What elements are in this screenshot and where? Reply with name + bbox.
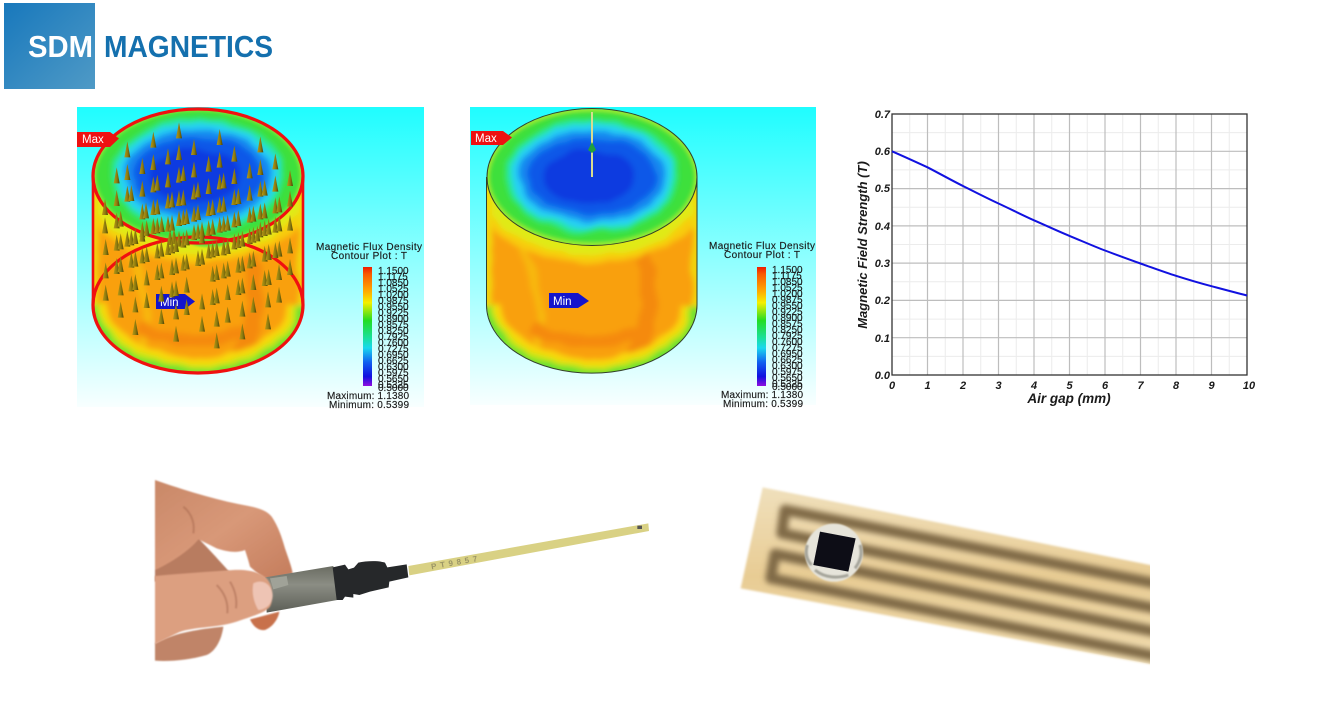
colour bar scale: 0.7275 [772, 343, 803, 354]
flag: Max [471, 131, 512, 145]
colour bar scale: 0.9550 [378, 302, 409, 313]
colour bar scale [772, 265, 803, 393]
handle button [270, 576, 288, 589]
y axis ticks: 0.6 [875, 146, 891, 158]
flag: Min [549, 293, 589, 308]
legend title: Magnetic Flux Density [709, 241, 815, 252]
colour bar scale: 0.8900 [378, 314, 409, 325]
colour bar scale: 1.0200 [772, 289, 803, 300]
max and min values: Maximum: 1.1380 [327, 391, 409, 402]
colour bar scale: 0.6625 [378, 356, 409, 367]
colour bar scale: 0.5650 [378, 374, 409, 385]
colour bar scale: 1.1175 [772, 271, 802, 282]
colour bar scale: 0.7925 [378, 332, 409, 343]
colour bar scale: 0.6300 [378, 362, 409, 373]
logo text MAGNETICS: MAGNETICS [104, 29, 273, 64]
colour bar [757, 267, 766, 386]
legend: flux density [709, 241, 815, 410]
y axis ticks [875, 109, 891, 382]
max and min values: Maximum: 1.1380 [721, 390, 803, 401]
colour bar scale: 0.6950 [772, 349, 803, 360]
colour bar scale: 0.6950 [378, 350, 409, 361]
logo blue square [4, 3, 95, 89]
colour bar scale: 0.9550 [772, 301, 803, 312]
flag: Min [156, 294, 195, 309]
colour bar scale: 1.0525 [378, 284, 409, 295]
strip body [741, 487, 1157, 665]
y axis ticks: 0.3 [875, 258, 890, 270]
copper traces [771, 510, 1160, 657]
colour bar scale: 0.8250 [378, 326, 409, 337]
photo: hall sensor close-up [741, 487, 1160, 665]
max and min values [721, 390, 803, 410]
y axis ticks: 0.5 [875, 183, 891, 195]
y axis title: Magnetic Field Strength (T) [855, 161, 870, 329]
colour bar scale: 0.5325 [772, 379, 803, 390]
colour bar scale: 0.7925 [772, 331, 803, 342]
colour bar scale: 1.0200 [378, 290, 409, 301]
flag: Min: Min [160, 297, 179, 309]
logo: SDM Magnetics [4, 3, 273, 89]
colour bar scale: 0.5975 [378, 368, 409, 379]
colour bar scale: 0.8900 [772, 313, 803, 324]
legend: flux density: Contour Plot : T [331, 251, 407, 262]
colour bar scale: 0.5000 [772, 382, 803, 393]
probe handle [265, 566, 337, 613]
colour bar scale: 1.0850 [772, 277, 803, 288]
sensor strip [408, 523, 649, 575]
hand [155, 480, 293, 661]
flag: Max: Max [82, 134, 104, 146]
colour bar scale: 0.9875 [772, 295, 803, 306]
colour bar scale: 1.1500 [772, 265, 803, 276]
panel: contour plot with vector cones [73, 107, 424, 411]
logo text SDM: SDM [28, 29, 93, 64]
panel background [77, 107, 424, 407]
x axis ticks: 3 [995, 380, 1002, 392]
legend: flux density: Contour Plot : T [724, 250, 800, 261]
cylinder heat map [73, 108, 323, 396]
x axis ticks: 5 [1066, 380, 1073, 392]
y axis ticks: 0.4 [875, 221, 890, 233]
colour bar scale [378, 266, 409, 394]
plot background [892, 114, 1247, 375]
panel: contour plot solid [467, 107, 816, 410]
magnetic field vector cones [102, 122, 293, 348]
x axis ticks: 0 [889, 380, 896, 392]
colour bar scale: 0.6300 [772, 361, 803, 372]
line chart: field strength vs air gap [855, 109, 1256, 406]
colour bar scale: 0.7275 [378, 344, 409, 355]
legend title: Magnetic Flux Density [316, 242, 422, 253]
colour bar scale: 0.7600 [772, 337, 803, 348]
colour bar scale: 1.1175 [378, 272, 408, 283]
centre probe marker [588, 112, 596, 177]
flag: Max [77, 132, 119, 147]
colour bar scale: 1.0525 [772, 283, 803, 294]
panel background [470, 107, 816, 405]
plot frame [892, 114, 1247, 375]
curve [892, 151, 1247, 296]
max and min values: Minimum: 0.5399 [723, 399, 803, 410]
flag: Max: Max [475, 133, 497, 145]
x axis ticks: 9 [1208, 380, 1215, 392]
colour bar scale: 1.0850 [378, 278, 409, 289]
colour bar scale: 1.1500 [378, 266, 409, 277]
x axis ticks: 2 [959, 380, 966, 392]
max and min values: Minimum: 0.5399 [329, 400, 409, 411]
colour bar scale: 0.5975 [772, 367, 803, 378]
colour bar [363, 267, 372, 386]
x axis ticks: 8 [1173, 380, 1180, 392]
strip marking: PT9857 [430, 554, 479, 571]
probe connector [333, 561, 408, 600]
colour bar scale: 0.5000 [378, 383, 409, 394]
x axis ticks: 4 [1030, 380, 1037, 392]
chip mount [805, 524, 863, 582]
y axis ticks: 0.2 [875, 295, 890, 307]
x axis title: Air gap (mm) [1026, 391, 1111, 406]
x axis ticks: 10 [1243, 380, 1256, 392]
x axis ticks: 6 [1102, 380, 1109, 392]
x axis ticks: 7 [1137, 380, 1144, 392]
y axis ticks: 0.7 [875, 109, 891, 121]
colour bar scale: 0.9225 [772, 307, 803, 318]
colour bar scale: 0.5325 [378, 380, 409, 391]
colour bar scale: 0.6625 [772, 355, 803, 366]
colour bar scale: 0.8575 [378, 320, 409, 331]
colour bar scale: 0.5650 [772, 373, 803, 384]
max and min values [327, 391, 409, 411]
y axis ticks: 0.1 [875, 333, 890, 345]
x axis ticks: 1 [924, 380, 931, 392]
sensor tip [637, 526, 642, 529]
colour bar scale: 0.7600 [378, 338, 409, 349]
colour bar scale: 0.9225 [378, 308, 409, 319]
colour bar scale: 0.8575 [772, 319, 803, 330]
colour bar scale: 0.8250 [772, 325, 803, 336]
flag: Min: Min [553, 296, 572, 308]
colour bar scale: 0.9875 [378, 296, 409, 307]
y axis ticks: 0.0 [875, 370, 891, 382]
legend: flux density [316, 242, 422, 411]
black chip [813, 532, 856, 572]
photo: hand holding hall probe [155, 480, 649, 661]
thumb [155, 507, 273, 644]
cylinder heat map [467, 108, 717, 397]
x axis ticks [889, 380, 1256, 392]
